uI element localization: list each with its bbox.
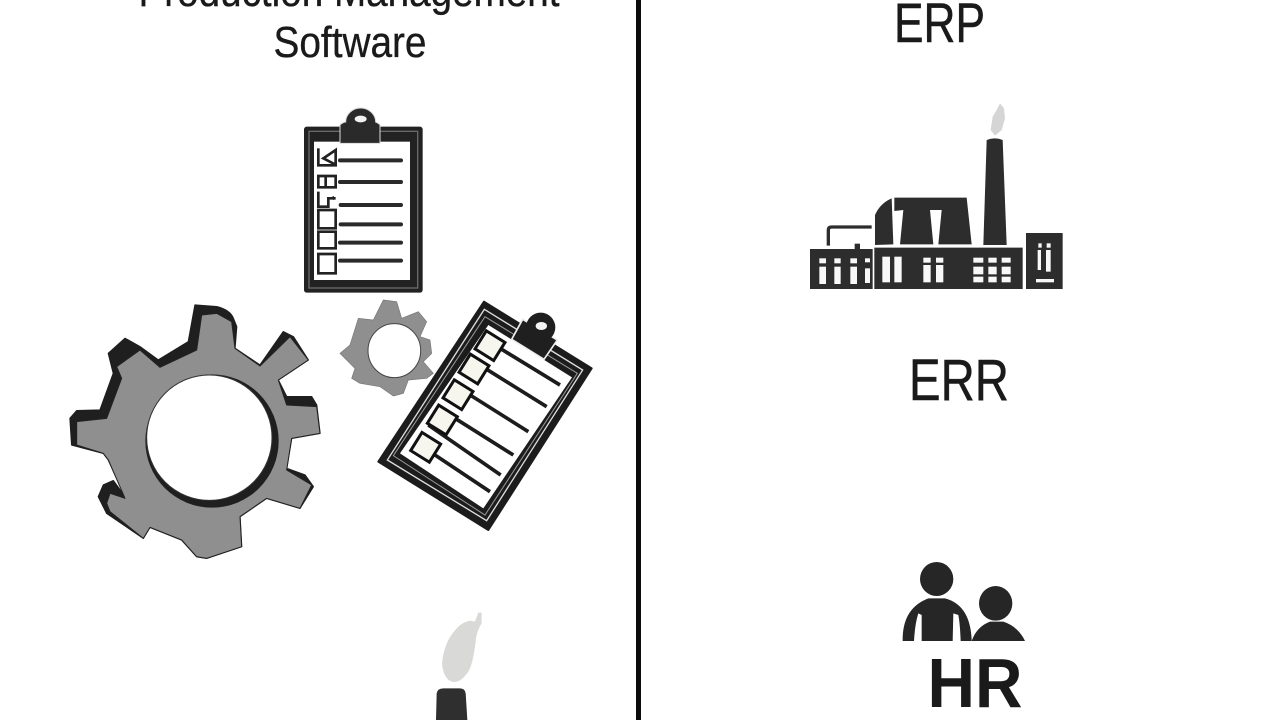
icon: upright clipboard [304,108,423,293]
icon: small gear [340,300,433,396]
icon: large gear [70,305,320,558]
icon: chimney with smoke [436,613,482,720]
heading: Production Management Software: Software [274,18,426,67]
icon: two people [903,562,1025,641]
heading: Production Management Software [138,0,560,67]
icon: factory [810,103,1063,289]
vertical divider [636,0,641,720]
icon: tilted clipboard [378,302,592,530]
heading: ERR: ERR [909,348,1009,413]
label: HR: HR [928,644,1022,720]
